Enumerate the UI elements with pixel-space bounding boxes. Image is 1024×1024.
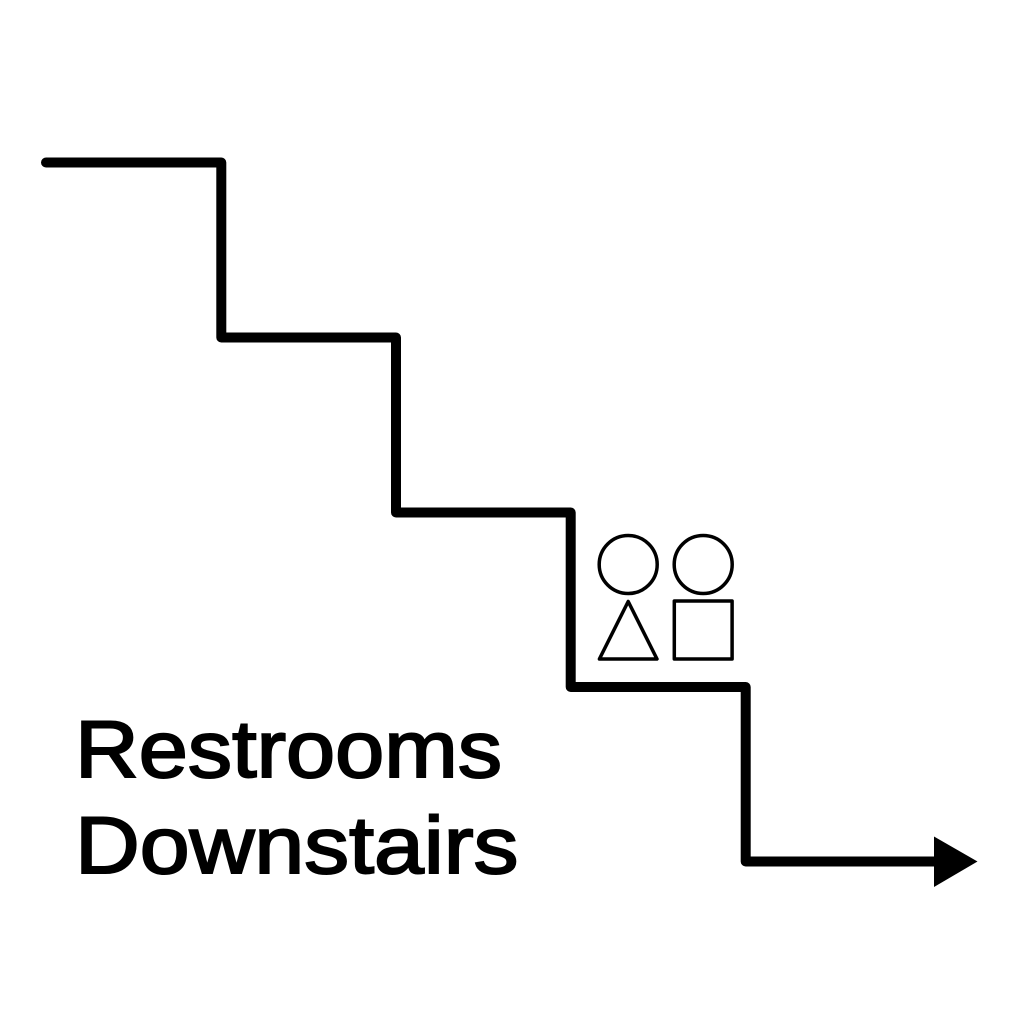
heading: Restrooms Downstairs [75,705,518,891]
staircase arrow [46,162,978,887]
icon: restroom symbols [599,536,732,659]
heading: Restrooms Downstairs: Restrooms [75,705,502,795]
heading: Restrooms Downstairs: Downstairs [75,801,518,891]
